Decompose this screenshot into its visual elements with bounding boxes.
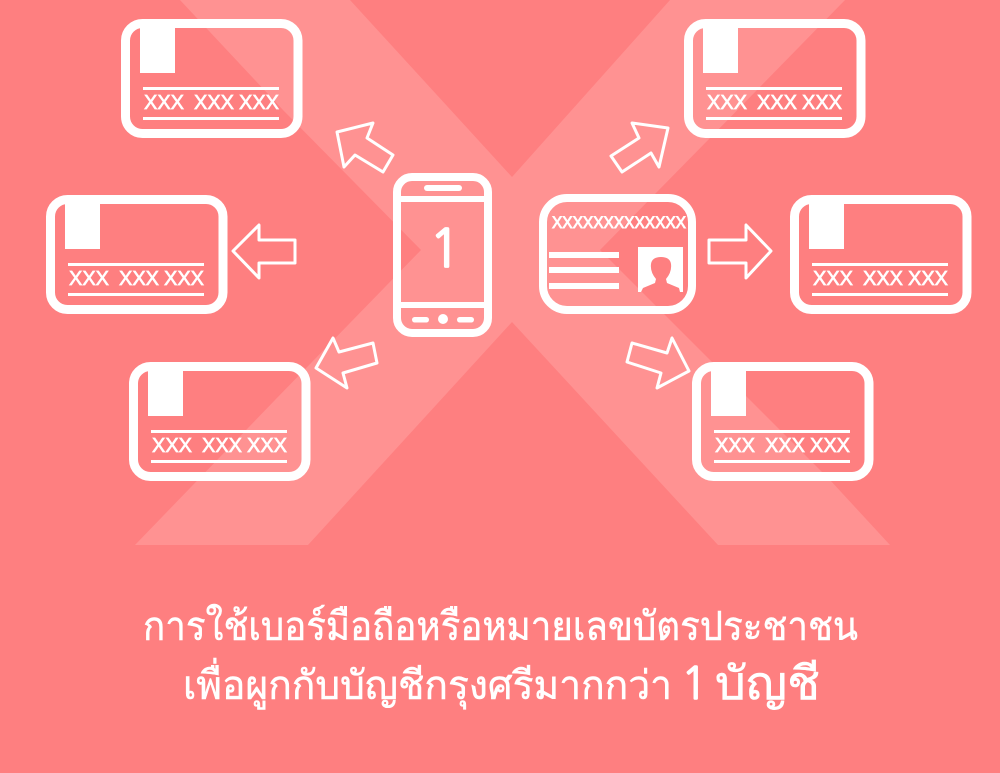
id card number: XXXXXXXXXXXXX [552,214,686,232]
card: bottom right: XXX [765,435,805,457]
icon: mobile phone [397,177,488,333]
card: bottom right [696,366,869,476]
arrow: id card to middle right card [709,225,771,278]
caption line 2: เพื่อผูกกับบัญชีกรุงศรีมากกว่า [183,658,672,710]
card: bottom right: XXX [715,435,755,457]
card: middle left [50,200,223,310]
card: top left: XXX [144,92,184,114]
arrow: phone to middle left card [233,225,295,278]
card: top left: XXX [194,92,234,114]
card: middle right: XXX [813,268,853,290]
id photo with silhouette [638,247,683,292]
arrow: phone to top left card [337,123,393,172]
card: top left: XXX [239,92,279,114]
arrow: id card to bottom right card [627,338,689,388]
caption emphasis: บัญชี [715,657,820,709]
caption emphasis: 1 [681,662,708,706]
caption [143,603,858,710]
phone number 1: 1 [429,223,461,275]
arrow: id card to top right card [611,123,668,172]
card: bottom left [134,366,306,476]
card: middle right [794,200,967,310]
card: top left [126,24,298,134]
card: middle left: XXX [164,268,204,290]
background letter X [135,0,890,545]
card: middle left: XXX [119,268,159,290]
card: middle right: XXX [863,268,903,290]
card: top right [688,24,861,134]
icon: id card [543,198,692,310]
card: bottom left: XXX [152,435,192,457]
arrow: phone to bottom left card [316,338,377,388]
card: middle left: XXX [69,268,109,290]
card: top right: XXX [757,92,797,114]
card: bottom left: XXX [202,435,242,457]
card: middle right: XXX [908,268,948,290]
caption line 1: การใช้เบอร์มือถือหรือหมายเลขบัตรประชาชน [143,603,858,649]
card: bottom right: XXX [810,435,850,457]
card: top right: XXX [802,92,842,114]
card: bottom left: XXX [247,435,287,457]
card: top right: XXX [707,92,747,114]
